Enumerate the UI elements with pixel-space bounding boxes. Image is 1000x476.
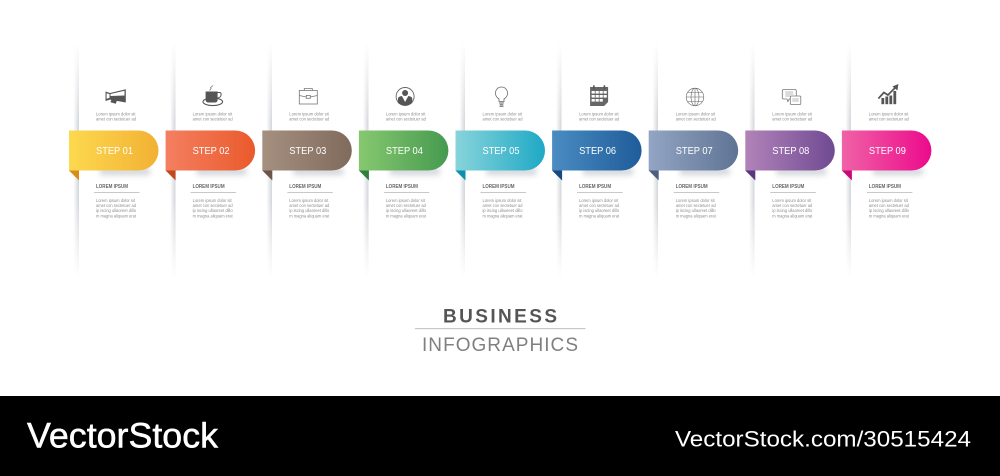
caption [676, 111, 716, 121]
caption [772, 111, 813, 121]
text block [384, 184, 429, 218]
text block [287, 184, 333, 218]
title [415, 306, 586, 356]
icon: globe [686, 88, 704, 106]
text block [867, 184, 912, 218]
ribbon fold [842, 170, 852, 180]
text block: ip iscing ullaoreet dillo [579, 208, 619, 213]
ribbon fold [456, 170, 466, 180]
caption: Lorem ipsum dolor sit [772, 111, 812, 116]
caption: Lorem ipsum dolor sit [579, 111, 619, 116]
icon: growth chart [878, 84, 898, 104]
text block: ip iscing ullaoreet dillo [193, 208, 233, 213]
step label: STEP 05 [482, 145, 520, 157]
panel: step 05 [456, 87, 545, 218]
step tab [456, 130, 545, 170]
footer bar [0, 396, 1000, 476]
text block: amet con sectetuer ad [193, 203, 233, 208]
text block: m magna aliquam erat [772, 213, 813, 218]
text block: m magna aliquam erat [386, 213, 427, 218]
caption [482, 111, 523, 121]
caption: Lorem ipsum dolor sit [96, 111, 136, 116]
caption: Lorem ipsum dolor sit [193, 111, 233, 116]
step label: STEP 02 [193, 145, 230, 157]
panel: step 06 [552, 85, 642, 218]
text block: ip iscing ullaoreet dillo [386, 208, 426, 213]
caption: amet con sectetuer ad [386, 116, 426, 121]
tab shadow [390, 168, 440, 175]
text block: m magna aliquam erat [676, 213, 716, 218]
step tab [166, 130, 255, 170]
step tab [262, 130, 352, 170]
step label: STEP 01 [96, 145, 133, 157]
caption [96, 111, 136, 121]
column edge shadows [74, 58, 851, 264]
ribbon fold [262, 170, 272, 180]
icon: briefcase [299, 88, 317, 104]
text block [480, 184, 526, 218]
icon: calendar [590, 85, 608, 106]
tab shadow [197, 168, 247, 175]
text block: Lorem ipsum dolor sit [386, 198, 426, 203]
icon: megaphone [106, 89, 126, 104]
caption: amet con sectetuer ad [289, 116, 330, 121]
ribbon fold [552, 170, 562, 180]
icon: light bulb [496, 87, 508, 106]
panel: step 01 [69, 89, 158, 218]
tab shadow [293, 168, 343, 175]
text block: m magna aliquam erat [289, 213, 330, 218]
step tab [649, 130, 738, 170]
caption: Lorem ipsum dolor sit [289, 111, 329, 116]
step tab [842, 130, 931, 170]
step label: STEP 07 [676, 145, 713, 157]
step label: STEP 03 [289, 145, 326, 157]
text block: m magna aliquam erat [869, 213, 910, 218]
panel: step 08 [745, 90, 835, 218]
caption: Lorem ipsum dolor sit [869, 111, 909, 116]
step tab [552, 130, 642, 170]
text block [94, 184, 140, 218]
ribbon fold [359, 170, 369, 180]
step label: STEP 04 [386, 145, 423, 157]
icon: person [396, 88, 414, 106]
text block: m magna aliquam erat [482, 213, 523, 218]
text block: ip iscing ullaoreet dillo [772, 208, 813, 213]
text block: Lorem ipsum dolor sit [869, 198, 909, 203]
tab shadow [486, 168, 536, 175]
text block: amet con sectetuer ad [482, 203, 523, 208]
caption [289, 111, 330, 121]
step tab [69, 130, 158, 170]
caption: Lorem ipsum dolor sit [386, 111, 426, 116]
caption: amet con sectetuer ad [193, 116, 233, 121]
caption [579, 111, 619, 121]
brand name: VectorStock [27, 416, 219, 456]
step tab [359, 130, 448, 170]
text block: amet con sectetuer ad [869, 203, 909, 208]
caption: amet con sectetuer ad [676, 116, 716, 121]
caption: amet con sectetuer ad [482, 116, 523, 121]
text block: LOREM IPSUM [96, 184, 128, 190]
text block: amet con sectetuer ad [96, 203, 136, 208]
step label: STEP 09 [869, 145, 906, 157]
ribbon fold [166, 170, 176, 180]
text block: LOREM IPSUM [772, 184, 804, 190]
title: BUSINESS [443, 306, 557, 328]
text block: ip iscing ullaoreet dillo [676, 208, 716, 213]
text block: amet con sectetuer ad [676, 203, 716, 208]
caption: amet con sectetuer ad [96, 116, 136, 121]
text block: Lorem ipsum dolor sit [193, 198, 232, 203]
step tab [745, 130, 835, 170]
caption [869, 111, 909, 121]
step label: STEP 06 [579, 145, 616, 157]
text block: amet con sectetuer ad [579, 203, 619, 208]
ribbon fold [745, 170, 755, 180]
text block: LOREM IPSUM [869, 184, 901, 190]
text block: Lorem ipsum dolor sit [772, 198, 812, 203]
icon: coffee cup [203, 86, 223, 106]
step label: STEP 08 [772, 145, 809, 157]
tab shadow [100, 168, 150, 175]
panel: step 03 [262, 88, 352, 218]
caption: amet con sectetuer ad [772, 116, 813, 121]
text block: ip iscing ullaoreet dillo [96, 208, 136, 213]
tab shadow [873, 168, 923, 175]
tab shadow [583, 168, 633, 175]
caption: Lorem ipsum dolor sit [482, 111, 523, 116]
text block: LOREM IPSUM [676, 184, 708, 190]
text block: LOREM IPSUM [193, 184, 225, 190]
image id: VectorStock.com/30515424 [675, 426, 971, 452]
panel: step 09 [842, 84, 931, 218]
text block: amet con sectetuer ad [386, 203, 426, 208]
caption: amet con sectetuer ad [869, 116, 909, 121]
text block: ip iscing ullaoreet dillo [869, 208, 909, 213]
icon: chat bubbles [782, 90, 801, 104]
ribbon fold [69, 170, 79, 180]
text block: Lorem ipsum dolor sit [96, 198, 136, 203]
text block: amet con sectetuer ad [772, 203, 813, 208]
panel: step 04 [359, 88, 448, 218]
text block [770, 184, 816, 218]
text block: Lorem ipsum dolor sit [482, 198, 522, 203]
text block: m magna aliquam erat [579, 213, 620, 218]
text block: LOREM IPSUM [386, 184, 418, 190]
text block: Lorem ipsum dolor sit [676, 198, 715, 203]
caption: amet con sectetuer ad [579, 116, 619, 121]
text block: LOREM IPSUM [289, 184, 321, 190]
text block: Lorem ipsum dolor sit [289, 198, 329, 203]
tab shadow [776, 168, 826, 175]
title: INFOGRAPHICS [422, 335, 578, 356]
text block: LOREM IPSUM [579, 184, 611, 190]
text block: ip iscing ullaoreet dillo [482, 208, 523, 213]
text block [577, 184, 623, 218]
tab shadow [680, 168, 730, 175]
text block: m magna aliquam erat [193, 213, 233, 218]
text block: Lorem ipsum dolor sit [579, 198, 619, 203]
caption: Lorem ipsum dolor sit [676, 111, 716, 116]
panel: step 07 [649, 88, 738, 218]
caption [193, 111, 233, 121]
caption [386, 111, 426, 121]
text block: ip iscing ullaoreet dillo [289, 208, 330, 213]
panel: step 02 [166, 86, 255, 218]
text block: LOREM IPSUM [482, 184, 514, 190]
text block: amet con sectetuer ad [289, 203, 330, 208]
ribbon fold [649, 170, 659, 180]
text block [191, 184, 236, 218]
text block [674, 184, 719, 218]
text block: m magna aliquam erat [96, 213, 137, 218]
